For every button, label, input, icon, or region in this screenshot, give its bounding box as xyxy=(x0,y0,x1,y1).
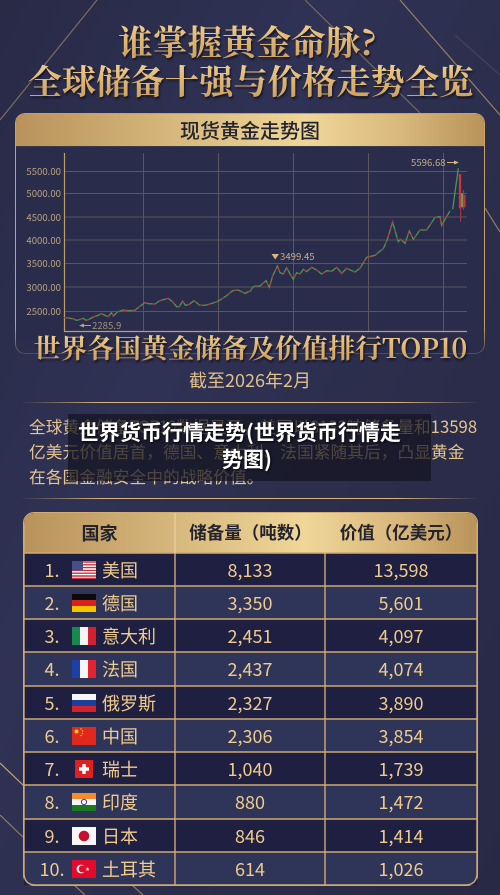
row 2: Germany: 3,350 xyxy=(228,590,272,616)
row 3: Italy: 意大利 xyxy=(102,622,156,648)
header: country: 国家 xyxy=(82,520,118,546)
row 2: Germany: 2. xyxy=(44,590,60,616)
row 6: China: 2,306 xyxy=(228,722,272,748)
row 2: Germany: 德国 xyxy=(102,590,138,616)
y axis labels xyxy=(26,164,61,318)
row 8: India: 8. xyxy=(44,789,60,815)
icon: Italian flag xyxy=(72,627,96,645)
summary paragraph: 全球黄金储备TOP10数据显示，美国以8133吨储备量和13598 xyxy=(29,414,477,438)
line chart: gold price: 2285.9 xyxy=(92,318,121,332)
icon: Russian flag xyxy=(72,694,96,712)
row 4: France: 法国 xyxy=(102,656,138,682)
row 2: Germany xyxy=(24,586,477,619)
row 9: Japan: 日本 xyxy=(102,822,138,848)
row 9: Japan: 846 xyxy=(235,822,265,848)
overlay caption: 势图) xyxy=(222,444,272,474)
row 1: USA xyxy=(24,553,477,586)
y axis labels: 3000.00 xyxy=(26,280,61,294)
ranking heading: 世界各国黄金储备及价值排行TOP10 xyxy=(34,327,467,366)
row 4: France xyxy=(24,652,477,686)
line chart: gold price: 3499.45 xyxy=(280,249,315,263)
row 3: Italy xyxy=(24,619,477,652)
row 5: Russia: 5. xyxy=(44,690,60,716)
title line 2: 全球储备十强与价格走势全览 xyxy=(28,55,473,104)
row 4: France: 4. xyxy=(44,656,60,682)
row 6: China: 6. xyxy=(44,722,60,748)
row 7: Switzerland: 1,040 xyxy=(228,756,272,782)
row 3: Italy: 4,097 xyxy=(379,622,423,648)
icon: French flag xyxy=(72,660,96,678)
title line 1 xyxy=(0,15,495,65)
header: value: 价值（亿美元） xyxy=(340,520,462,545)
row 10: Turkey: 614 xyxy=(235,856,265,882)
row 7: Switzerland: 1,739 xyxy=(379,756,423,782)
summary paragraph xyxy=(29,414,477,488)
y axis labels: 4000.00 xyxy=(26,233,61,247)
row 7: Switzerland xyxy=(24,752,477,785)
y axis labels: 4500.00 xyxy=(26,210,61,224)
summary paragraph: 在各国金融安全中的战略价值。 xyxy=(29,464,264,488)
row 8: India: 印度 xyxy=(102,789,138,815)
row 5: Russia: 2,327 xyxy=(228,690,272,716)
row 10: Turkey: 1,026 xyxy=(379,856,423,882)
y axis labels: 5000.00 xyxy=(26,186,61,200)
row 1: USA: 美国 xyxy=(102,556,138,582)
chart header: 现货黄金走势图 xyxy=(180,115,320,144)
overlay caption: 世界货币行情走势(世界货币行情走 xyxy=(78,417,401,447)
row 6: China xyxy=(24,719,477,752)
row 5: Russia: 俄罗斯 xyxy=(102,690,156,716)
row 1: USA: 1. xyxy=(44,556,60,582)
date subtitle: 截至2026年2月 xyxy=(189,367,311,393)
row 10: Turkey xyxy=(24,852,477,885)
row 9: Japan: 9. xyxy=(44,822,60,848)
icon: Japanese flag xyxy=(72,827,96,845)
table header xyxy=(24,513,477,554)
panel: spot gold chart xyxy=(15,113,485,354)
y axis labels: 3500.00 xyxy=(26,256,61,270)
row 9: Japan xyxy=(24,819,477,852)
row 8: India: 880 xyxy=(235,789,265,815)
title line 1: 谁掌握黄金命脉? xyxy=(118,15,377,65)
row 2: Germany: 5,601 xyxy=(379,590,423,616)
row 10: Turkey: 10. xyxy=(40,856,64,882)
row 4: France: 2,437 xyxy=(228,656,272,682)
row 10: Turkey: 土耳其 xyxy=(102,856,156,882)
line chart: gold price xyxy=(64,153,467,332)
icon: Swiss flag xyxy=(75,760,93,778)
row 6: China: 中国 xyxy=(102,722,138,748)
row 5: Russia: 3,890 xyxy=(379,690,423,716)
row 1: USA: 8,133 xyxy=(228,556,272,582)
overlay caption xyxy=(68,414,431,481)
row 4: France: 4,074 xyxy=(379,656,423,682)
y axis labels: 2500.00 xyxy=(26,304,61,318)
icon: Chinese flag xyxy=(72,727,96,745)
row 1: USA: 13,598 xyxy=(374,556,428,582)
title xyxy=(28,15,474,104)
row 9: Japan: 1,414 xyxy=(379,822,423,848)
panel: ranking table xyxy=(23,512,478,886)
icon: US flag xyxy=(72,561,96,579)
row 7: Switzerland: 7. xyxy=(44,756,60,782)
header: reserves: 储备量（吨数） xyxy=(189,520,312,545)
line chart: gold price: 5596.68 xyxy=(411,155,446,169)
summary paragraph: 亿美元价值居首，德国、意大利、法国紧随其后，凸显黄金 xyxy=(29,439,465,463)
row 5: Russia xyxy=(24,686,477,719)
row 6: China: 3,854 xyxy=(379,722,423,748)
icon: German flag xyxy=(72,594,96,612)
icon: Indian flag xyxy=(72,793,96,811)
icon: Turkish flag xyxy=(72,860,96,878)
row 3: Italy: 3. xyxy=(44,622,60,648)
row 3: Italy: 2,451 xyxy=(228,622,272,648)
row 8: India xyxy=(24,785,477,819)
y axis labels: 5500.00 xyxy=(26,164,61,178)
row 8: India: 1,472 xyxy=(379,789,423,815)
chart header xyxy=(16,114,484,147)
row 7: Switzerland: 瑞士 xyxy=(102,756,138,782)
